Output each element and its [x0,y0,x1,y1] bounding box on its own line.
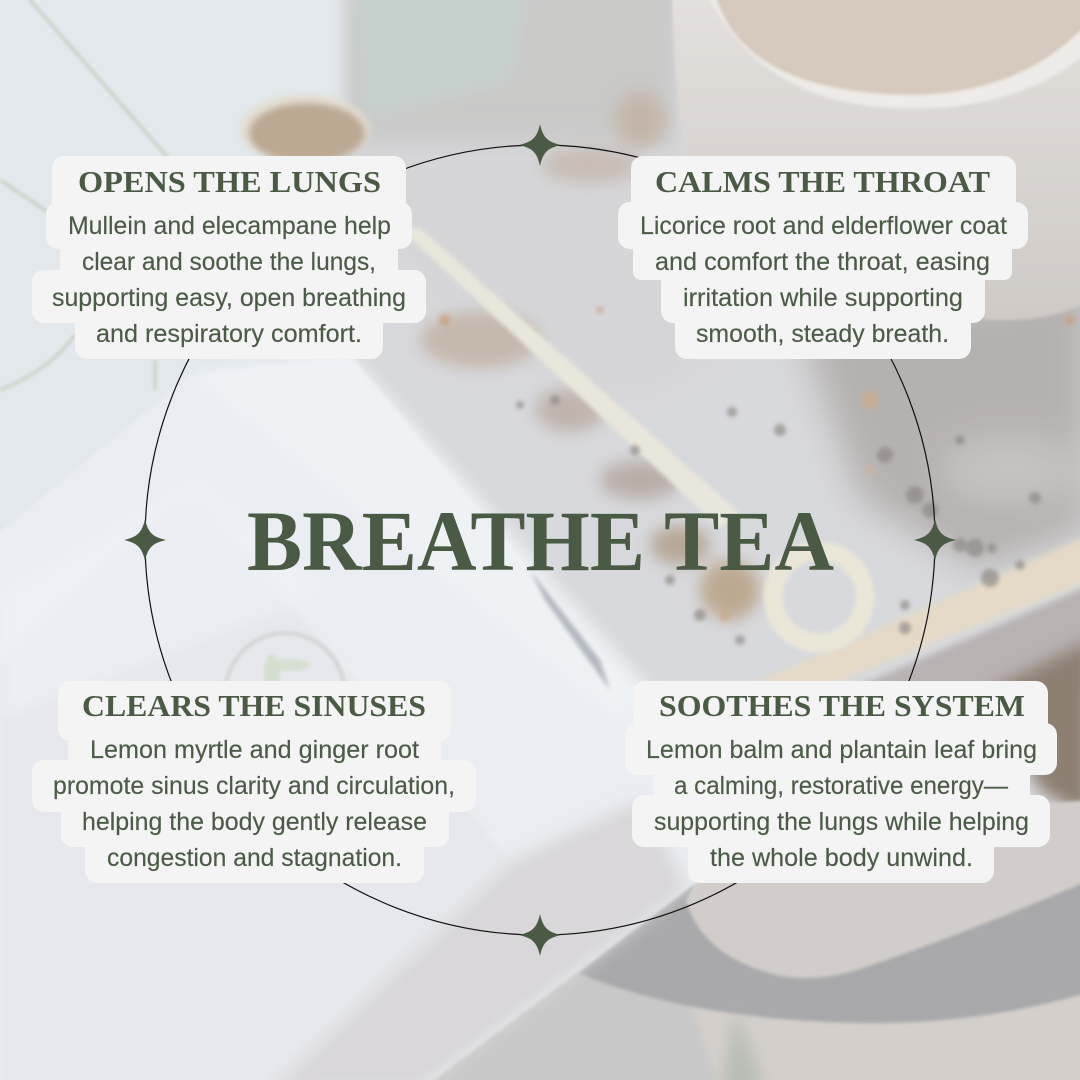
body text: calms the throat: smooth, steady breath. [696,320,949,348]
spoon handle and ring [400,228,865,643]
body text: clears the sinuses: congestion and stagnation. [107,844,402,872]
body text: calms the throat: irritation while supporting [683,284,963,312]
star top [519,124,561,166]
panel: soothes the system [625,681,1057,883]
body text: calms the throat [640,212,1007,348]
body text: opens the lungs: clear and soothe the lungs, [82,248,376,276]
body text: clears the sinuses: promote sinus clarity and circulation, [53,772,455,800]
body text: opens the lungs: and respiratory comfort. [96,320,362,348]
body text: opens the lungs: supporting easy, open breathing [52,284,406,312]
measuring spoon with tea [240,95,370,165]
title: BREATHE TEA [247,493,834,589]
body text: soothes the system: Lemon balm and plantain leaf bring [646,736,1037,764]
star bottom [519,914,561,956]
package logo [225,633,345,757]
body text: soothes the system [646,736,1037,872]
star right [914,519,956,561]
tea specks [439,306,1075,645]
panel: opens the lungs [32,156,426,359]
star left [124,519,166,561]
package [0,355,700,1080]
panel: clears the sinuses [32,681,476,883]
heading: calms the throat: CALMS THE THROAT [655,164,990,199]
body text: clears the sinuses: Lemon myrtle and ginger root [90,736,419,764]
loose tea [420,92,760,620]
heading: clears the sinuses: CLEARS THE SINUSES [82,688,426,723]
body text: soothes the system: a calming, restorative energy— [674,772,1008,800]
body text: clears the sinuses [53,736,455,872]
body text: soothes the system: the whole body unwind. [710,844,973,872]
heading: soothes the system: SOOTHES THE SYSTEM [659,688,1025,723]
plant stems [0,0,170,390]
tea tray edge [740,535,1080,700]
body text: clears the sinuses: helping the body gently release [82,808,427,836]
circle ring [145,145,935,935]
cup [672,0,1080,320]
body text: opens the lungs: Mullein and elecampane help [68,212,391,240]
panel: calms the throat [618,156,1028,359]
heading: opens the lungs: OPENS THE LUNGS [78,164,381,199]
body text: opens the lungs [52,212,406,348]
floor and plate shadow [400,800,1080,1080]
body text: calms the throat: and comfort the throat, easing [655,248,990,276]
body text: soothes the system: supporting the lungs while helping [654,808,1029,836]
body text: calms the throat: Licorice root and elderflower coat [640,212,1007,240]
